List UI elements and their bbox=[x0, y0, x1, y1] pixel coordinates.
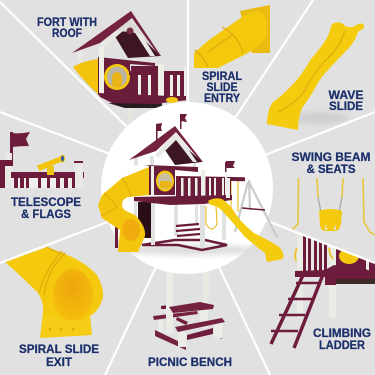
label: climbing ladder: CLIMBING bbox=[313, 326, 371, 340]
label: climbing ladder: LADDER bbox=[319, 338, 365, 352]
label: telescope and flags: TELESCOPE bbox=[11, 195, 81, 209]
label: wave slide: WAVE bbox=[328, 88, 364, 102]
label: fort with roof: ROOF bbox=[52, 26, 82, 40]
label: telescope and flags: & FLAGS bbox=[21, 207, 71, 221]
illustration: spiral slide exit bbox=[5, 247, 103, 338]
label: spiral slide entry: ENTRY bbox=[204, 91, 240, 105]
illustration: picnic bench bbox=[153, 270, 225, 350]
label: telescope and flags bbox=[11, 195, 81, 221]
label: spiral slide exit: SPIRAL SLIDE bbox=[19, 342, 99, 356]
label: fort with roof bbox=[37, 15, 97, 40]
centre playset illustration bbox=[98, 114, 283, 262]
label: swing beam and seats: SWING BEAM bbox=[292, 150, 370, 164]
label: climbing ladder bbox=[313, 326, 371, 352]
illustration: swing beam and seats bbox=[292, 178, 375, 235]
label: spiral slide exit bbox=[19, 342, 99, 369]
label: fort with roof: FORT WITH bbox=[37, 15, 97, 29]
label: spiral slide exit: EXIT bbox=[46, 355, 73, 369]
label: wave slide bbox=[328, 88, 364, 113]
illustration: wave slide bbox=[267, 22, 364, 130]
label: spiral slide entry: SLIDE bbox=[206, 80, 238, 94]
label: swing beam and seats: & SEATS bbox=[306, 162, 356, 176]
illustration: telescope and flags bbox=[0, 132, 84, 188]
illustration: fort with roof bbox=[72, 11, 186, 108]
label: picnic bench: PICNIC BENCH bbox=[148, 355, 232, 369]
label: spiral slide entry: SPIRAL bbox=[202, 69, 242, 83]
centre circle bbox=[101, 102, 273, 274]
label: spiral slide entry bbox=[202, 69, 242, 105]
illustration: spiral slide entry bbox=[194, 5, 270, 68]
illustration: climbing ladder bbox=[271, 232, 375, 348]
label: swing beam and seats bbox=[292, 150, 370, 176]
label: wave slide: SLIDE bbox=[329, 99, 363, 113]
